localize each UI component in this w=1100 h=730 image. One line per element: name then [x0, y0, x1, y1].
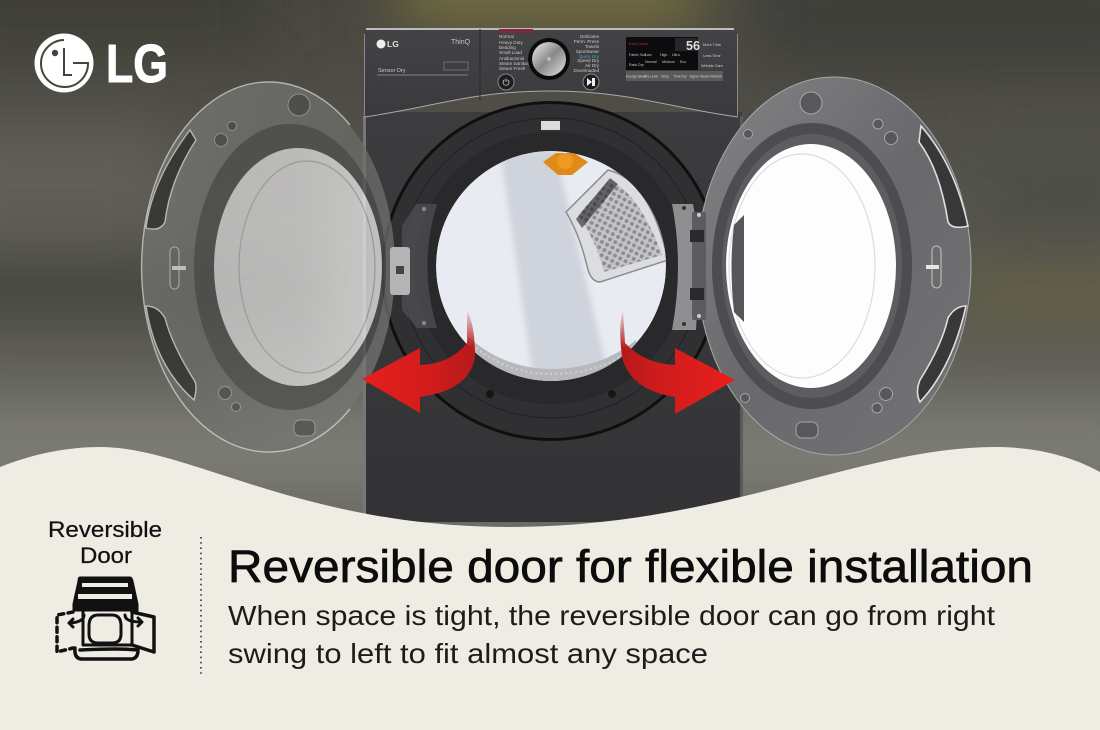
cream wave panel [0, 447, 1100, 730]
icon label: Reversible [48, 517, 162, 542]
cycle list right [573, 34, 600, 73]
orange bracket [543, 153, 588, 175]
cycle list right: Downloaded [573, 68, 599, 73]
cycle list right: Air Dry [585, 63, 600, 68]
display: Rack Dry [629, 63, 644, 67]
vent grille [566, 170, 668, 282]
arrow: left swing [362, 310, 475, 413]
LG logo [34, 34, 168, 94]
right door bosses [740, 92, 898, 438]
display: Normal [645, 60, 657, 64]
right door [690, 77, 971, 455]
left door seal [194, 124, 386, 410]
panel brand: ThinQ [451, 39, 471, 46]
cycle list left: Heavy Duty [499, 40, 523, 45]
option buttons [626, 71, 723, 81]
cycle list left [499, 29, 533, 71]
right door latch [926, 246, 941, 288]
drum [436, 150, 668, 390]
icon: dryer with reversible door [57, 577, 154, 659]
display: Extra Damp [629, 42, 648, 46]
cycle list right: Delicates [580, 34, 600, 39]
description [228, 600, 995, 669]
logo wordmark: LG [106, 34, 168, 94]
dryer [363, 28, 743, 522]
cycle list left: Small Load [499, 50, 522, 55]
description: When space is tight, the reversible door can go from right [228, 600, 995, 631]
right door hinge [690, 212, 706, 320]
panel brand: LG [387, 39, 399, 49]
option buttons: Dry Level [644, 74, 658, 78]
start button [583, 74, 599, 90]
option buttons: Temp [661, 74, 669, 78]
cycle list left: Steam Sanitary [499, 61, 531, 66]
right time buttons [701, 43, 723, 68]
dial [528, 38, 570, 80]
icon label [48, 517, 162, 568]
display: 56 [686, 39, 700, 53]
panel brand [376, 39, 471, 75]
display [626, 37, 700, 70]
hinge plate left [402, 204, 437, 328]
left door bosses [214, 94, 315, 436]
right time buttons: Wrinkle Care [701, 64, 723, 68]
arrow: right swing [620, 310, 735, 414]
left door handles [146, 130, 196, 400]
option buttons: Energy Saver [626, 74, 647, 78]
display: High [660, 53, 667, 57]
hinge plate right [672, 204, 697, 330]
dryer body [364, 112, 742, 522]
left door ghost [141, 82, 395, 452]
right door glass [726, 144, 896, 388]
power button: ⏻ [502, 78, 510, 88]
option buttons: Time Dry [673, 74, 687, 78]
latch on top [541, 121, 560, 130]
power button [498, 74, 514, 90]
cycle list left: Antibacterial [499, 56, 524, 61]
cycle list left: Normal [499, 34, 514, 39]
panel brand: Sensor Dry [378, 68, 406, 74]
display: Eco [680, 60, 686, 64]
cycle list left: Bedding [499, 45, 516, 50]
option buttons: Signal [689, 74, 699, 78]
right time buttons: More Time [703, 43, 721, 47]
right time buttons: Less Time [703, 54, 721, 58]
door opening ring [381, 101, 721, 441]
display: Ultra [672, 53, 680, 57]
left door glass [214, 148, 382, 386]
dotted divider [200, 537, 202, 674]
left hinge plate [390, 247, 410, 295]
left door latch [170, 247, 186, 289]
cycle list right: Quick Dry [579, 54, 600, 59]
cycle list right: Perm. Press [574, 39, 600, 44]
display: Fabric Soft. [629, 53, 647, 57]
description: swing to left to fit almost any space [228, 638, 708, 669]
headline: Reversible door for flexible installation [228, 541, 1033, 592]
display: Medium [662, 60, 675, 64]
control panel [364, 28, 738, 117]
option buttons: Steam Refresh [700, 74, 722, 78]
right door handles [918, 126, 968, 402]
lint mesh [468, 338, 636, 381]
cycle list right: Towels [585, 44, 600, 49]
logo emblem [34, 34, 94, 92]
cycle list left: Steam Fresh [499, 66, 526, 71]
screws [486, 390, 616, 398]
icon label: Door [80, 543, 132, 568]
cycle list right: Speed Dry [577, 58, 600, 63]
cycle list right: Sportswear [576, 49, 599, 54]
right door seal [712, 123, 912, 409]
display: Low [645, 53, 652, 57]
